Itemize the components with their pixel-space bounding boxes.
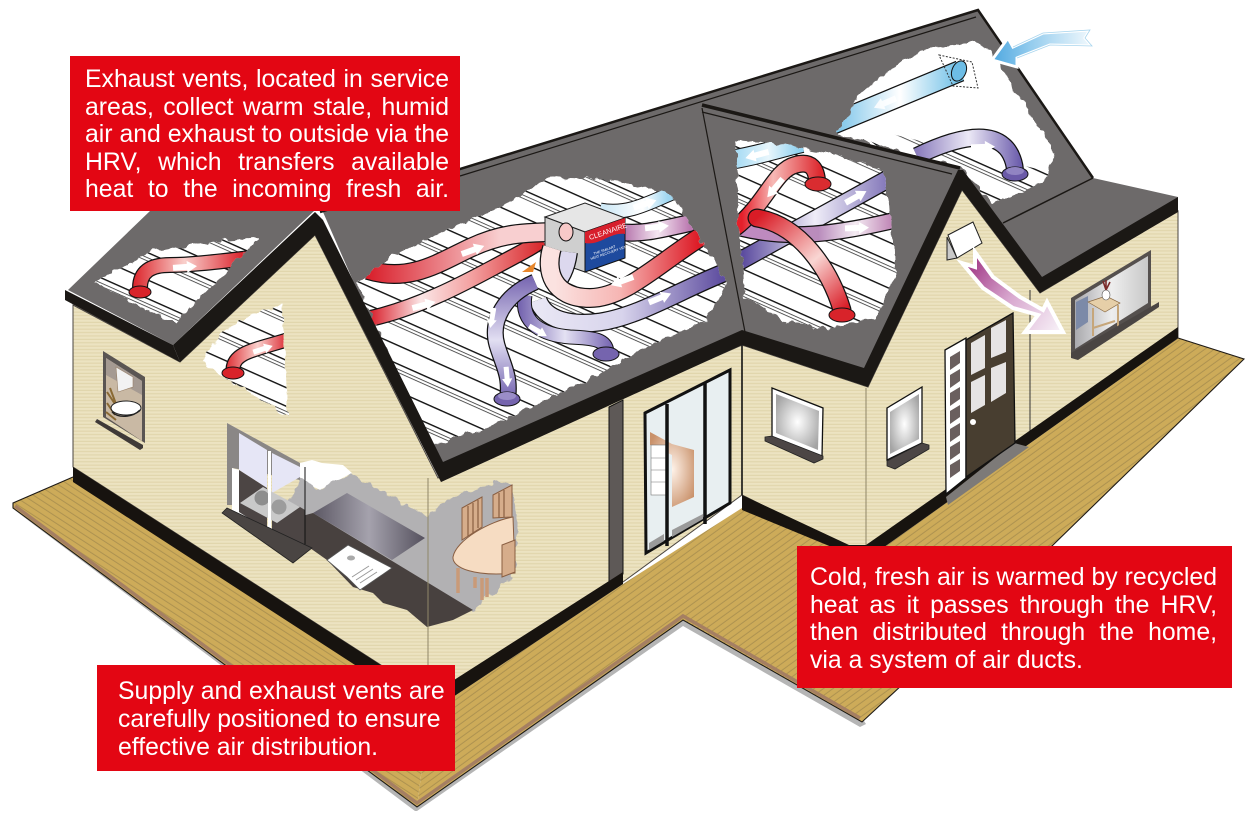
main and rear roof surface <box>323 10 1178 482</box>
right wing roof line <box>1003 178 1093 223</box>
duct: purple vent one <box>495 282 535 395</box>
left wing roof <box>68 211 314 345</box>
roof <box>68 10 1178 482</box>
sink <box>327 545 392 590</box>
white upper wall <box>300 460 352 490</box>
gable edge line <box>702 108 745 332</box>
callout: fresh air: via a system of air ducts. <box>810 646 1083 674</box>
cutaway: gable wall <box>203 304 289 416</box>
bathroom window <box>95 351 145 450</box>
duct: purple vent two <box>524 295 607 352</box>
HRV unit <box>545 203 641 272</box>
kitchen window <box>222 423 312 563</box>
wall corner lines <box>742 290 1030 545</box>
callout: exhaust vents <box>70 56 460 211</box>
walls <box>73 190 1178 696</box>
ridge line <box>320 10 1093 212</box>
duct: blue supply <box>600 193 672 211</box>
callout: supply and exhaust vents <box>97 665 455 771</box>
intake duct <box>825 71 960 127</box>
cutaway: left wing roof <box>94 237 260 324</box>
intake hood <box>939 55 978 88</box>
HRV under-port and red supply duct <box>522 236 702 298</box>
hob panel <box>313 493 425 560</box>
HRV unit: THE SMILART <box>593 244 617 256</box>
callout: exhaust vents: areas, collect warm stale, humid <box>85 94 449 120</box>
kitchen cutaway <box>277 460 517 696</box>
callout: supply and exhaust vents: effective air distribution. <box>118 734 378 761</box>
callout: fresh air <box>797 546 1232 688</box>
callout: exhaust vents: Exhaust vents, located in service <box>85 66 449 93</box>
intake air arrow <box>992 30 1092 67</box>
right middle window <box>887 387 929 469</box>
patio door <box>645 370 730 553</box>
exhaust air arrow <box>962 252 1063 332</box>
HRV main port <box>559 223 573 241</box>
duct: pink exhaust <box>620 222 695 233</box>
cutaway: rear roof <box>825 43 1055 215</box>
grey column <box>609 400 623 583</box>
callout: supply and exhaust vents: Supply and exhaust vents are <box>118 678 445 705</box>
duct: lower red <box>368 240 542 319</box>
deck <box>13 338 1244 811</box>
duct: purple to right <box>538 272 726 323</box>
front door <box>945 313 1029 505</box>
HRV unit: CLEANAIRE <box>588 222 628 242</box>
cutaway: main roof with HRV <box>356 176 727 444</box>
callout: fresh air: heat as it passes through the HRV, <box>810 592 1217 618</box>
duct: upper red <box>368 232 566 274</box>
wall base bands <box>73 327 1178 713</box>
callout: supply and exhaust vents: carefully positioned to ensure <box>118 706 441 733</box>
right bedroom window <box>1071 250 1159 360</box>
exhaust duct <box>917 138 1015 172</box>
cutaway: front gable roof <box>701 103 960 346</box>
intake arrow tail outline <box>1013 30 1092 58</box>
left middle window <box>765 388 823 463</box>
callout: fresh air: Cold, fresh air is warmed by recycled <box>810 564 1217 591</box>
callout: exhaust vents: heat to the incoming fresh air. <box>85 176 449 203</box>
dark counter <box>277 513 473 627</box>
roof eaves <box>65 170 1178 482</box>
callout: fresh air: then distributed through the home, <box>810 619 1217 646</box>
HRV unit: HEAT RECOVERY VENTILATOR <box>590 240 641 261</box>
wall exhaust hood <box>947 222 982 260</box>
callout: exhaust vents: air and exhaust to outside via the <box>85 121 449 148</box>
chairs and table <box>453 485 515 600</box>
callout: exhaust vents: HRV, which transfers available <box>85 148 449 176</box>
floor <box>277 473 517 610</box>
